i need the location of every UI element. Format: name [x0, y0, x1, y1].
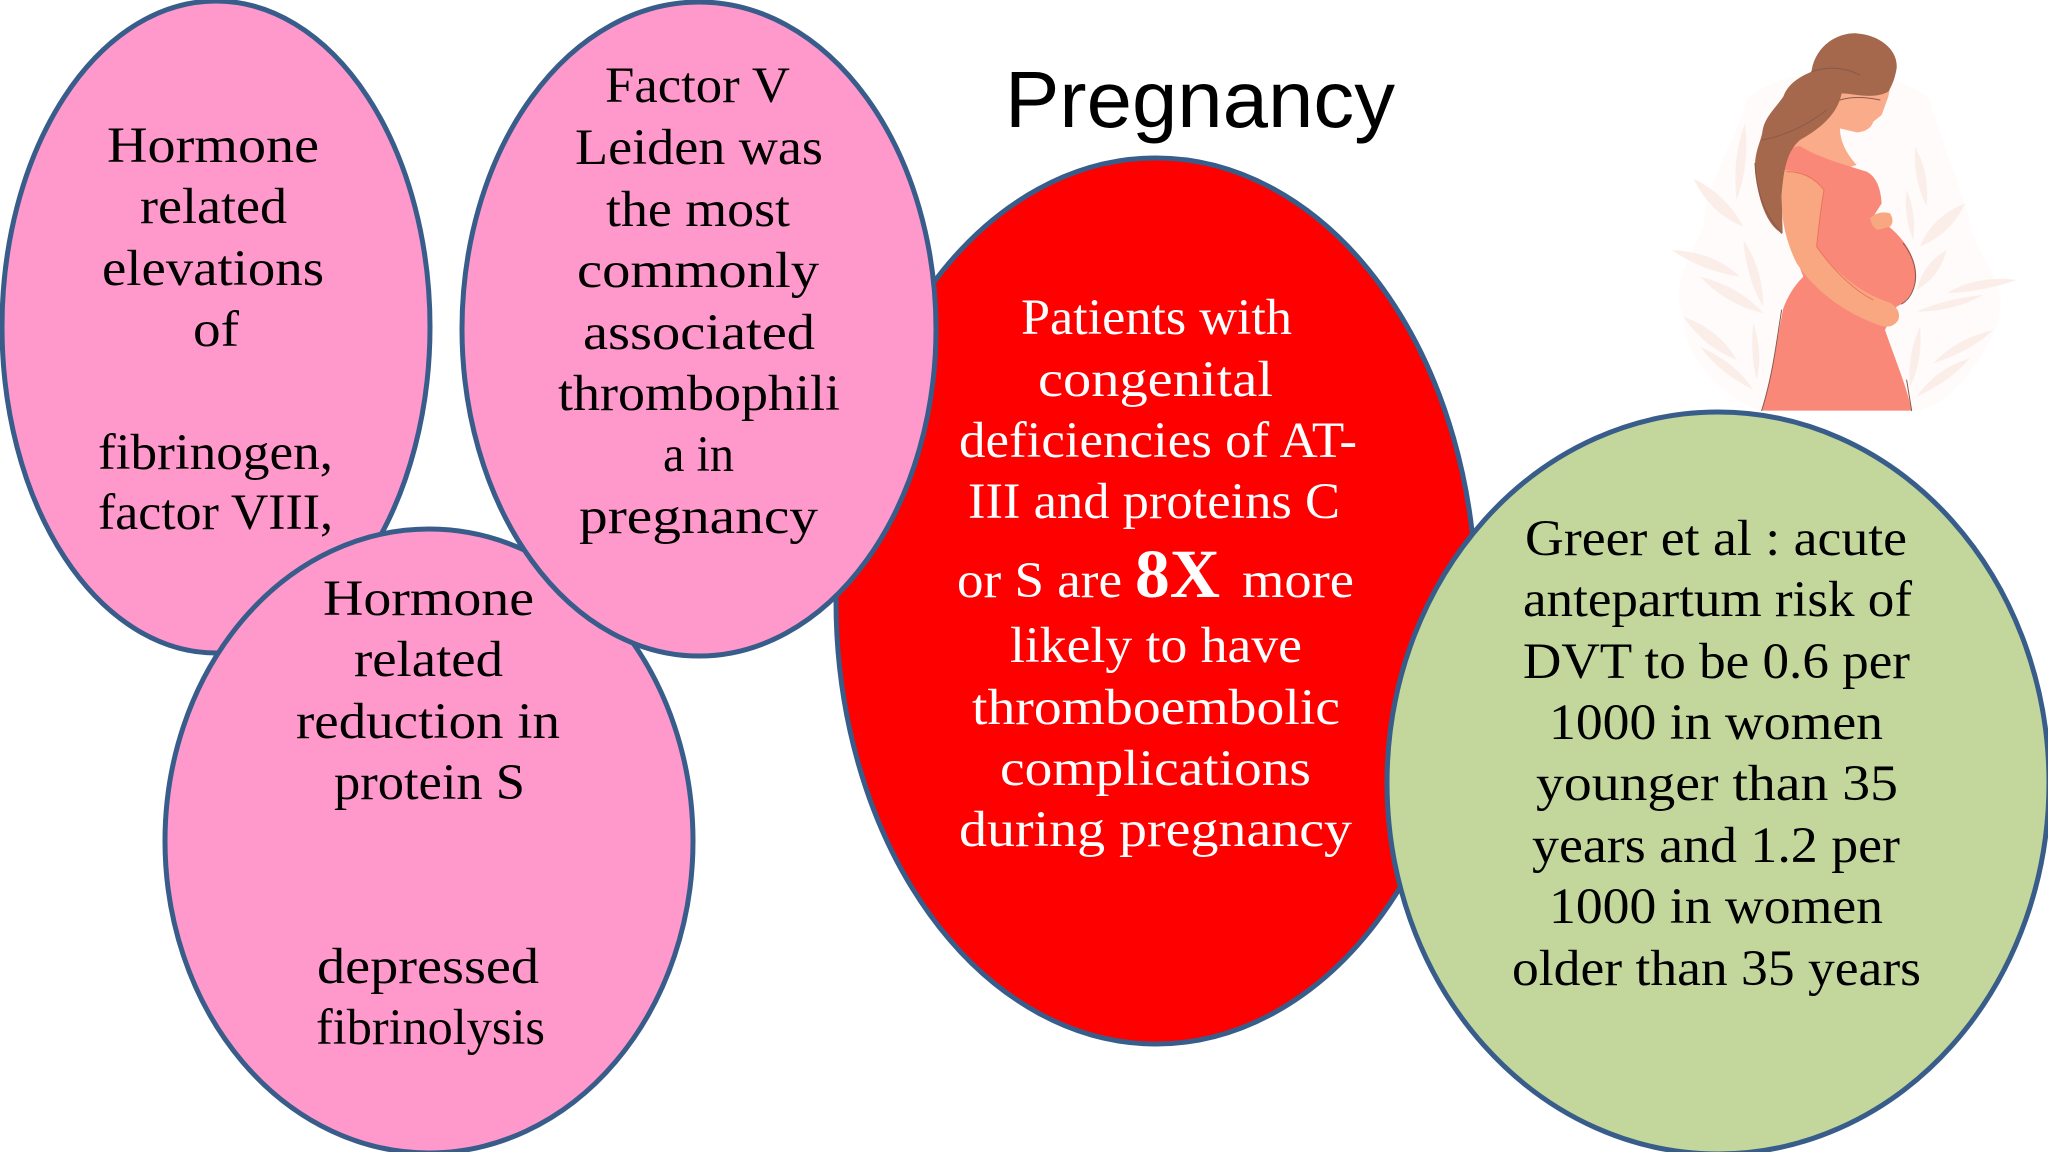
green oval text: DVT to be 0.6 per: [1523, 634, 1910, 690]
pink oval text: Hormone: [107, 118, 319, 174]
red oval text: thromboembolic: [972, 680, 1340, 736]
red oval text: or S are: [957, 553, 1122, 609]
green oval: [1387, 412, 2048, 1152]
pink oval text: of: [193, 302, 239, 358]
pink oval: [2, 1, 430, 653]
pink oval text: related: [140, 179, 287, 235]
pink oval text: [558, 58, 840, 545]
red oval text: 8X: [1135, 536, 1220, 612]
pink oval text: Leiden was: [575, 120, 823, 176]
panel: Greer et al antepartum risk (green): [1387, 412, 2048, 1152]
green oval text: younger than 35: [1536, 756, 1898, 812]
pink oval text: pregnancy: [579, 489, 819, 545]
pink oval text: a in: [663, 427, 734, 483]
pink oval text: depressed: [317, 939, 539, 995]
green oval text: [1512, 511, 1921, 997]
pink oval text: elevations: [102, 241, 324, 297]
green oval text: antepartum risk of: [1523, 572, 1912, 628]
pink oval text: [98, 118, 333, 541]
red oval text: [957, 290, 1357, 858]
hair: [1755, 33, 1897, 233]
illustration: pregnant woman: [1672, 33, 2017, 411]
panel: hormone related elevations (pink): [2, 1, 430, 653]
green oval text: Greer et al : acute: [1525, 511, 1907, 567]
pink oval: [462, 2, 936, 656]
green oval text: older than 35 years: [1512, 941, 1921, 997]
soft background glow: [1679, 72, 2001, 411]
panel: Factor V Leiden (pink): [462, 2, 936, 656]
red oval text: III and proteins C: [968, 474, 1340, 530]
pink oval text: reduction in: [296, 694, 560, 750]
red oval text: during pregnancy: [959, 802, 1353, 858]
pink oval text: fibrinolysis: [316, 1000, 545, 1056]
pink oval text: thrombophili: [558, 366, 840, 422]
pink oval text: factor VIII,: [98, 485, 333, 541]
red oval text: congenital: [1038, 352, 1273, 408]
red oval text: Patients with: [1021, 290, 1292, 346]
pink oval text: [296, 571, 560, 1056]
face and neck: [1787, 85, 1891, 173]
pink oval text: commonly: [577, 243, 820, 299]
red oval text: more: [1242, 553, 1354, 609]
dress folds: [1787, 172, 1873, 300]
pink oval text: related: [354, 632, 503, 688]
green oval text: 1000 in women: [1549, 695, 1883, 751]
panel: congenital deficiency risk (red): [836, 158, 1476, 1044]
red oval text: likely to have: [1010, 618, 1302, 674]
outline strokes: [1755, 68, 1916, 411]
pink oval text: associated: [583, 305, 815, 361]
pink oval text: protein S: [334, 755, 525, 811]
pink oval text: fibrinogen,: [98, 425, 333, 481]
title: Pregnancy: [1005, 55, 1395, 144]
red oval text: complications: [1000, 741, 1311, 797]
background leaves: [1672, 123, 2017, 397]
pink oval text: the most: [606, 182, 790, 238]
red oval: [836, 158, 1476, 1044]
pink oval: [165, 529, 693, 1152]
dress: [1762, 146, 1916, 411]
green oval text: 1000 in women: [1549, 879, 1883, 935]
panel: hormone related reduction in protein S (pink): [165, 529, 693, 1152]
red oval text: deficiencies of AT-: [959, 413, 1357, 469]
green oval text: years and 1.2 per: [1532, 818, 1900, 874]
pink oval text: Hormone: [323, 571, 534, 627]
arms and hands: [1782, 170, 1899, 327]
pink oval text: Factor V: [605, 58, 790, 114]
